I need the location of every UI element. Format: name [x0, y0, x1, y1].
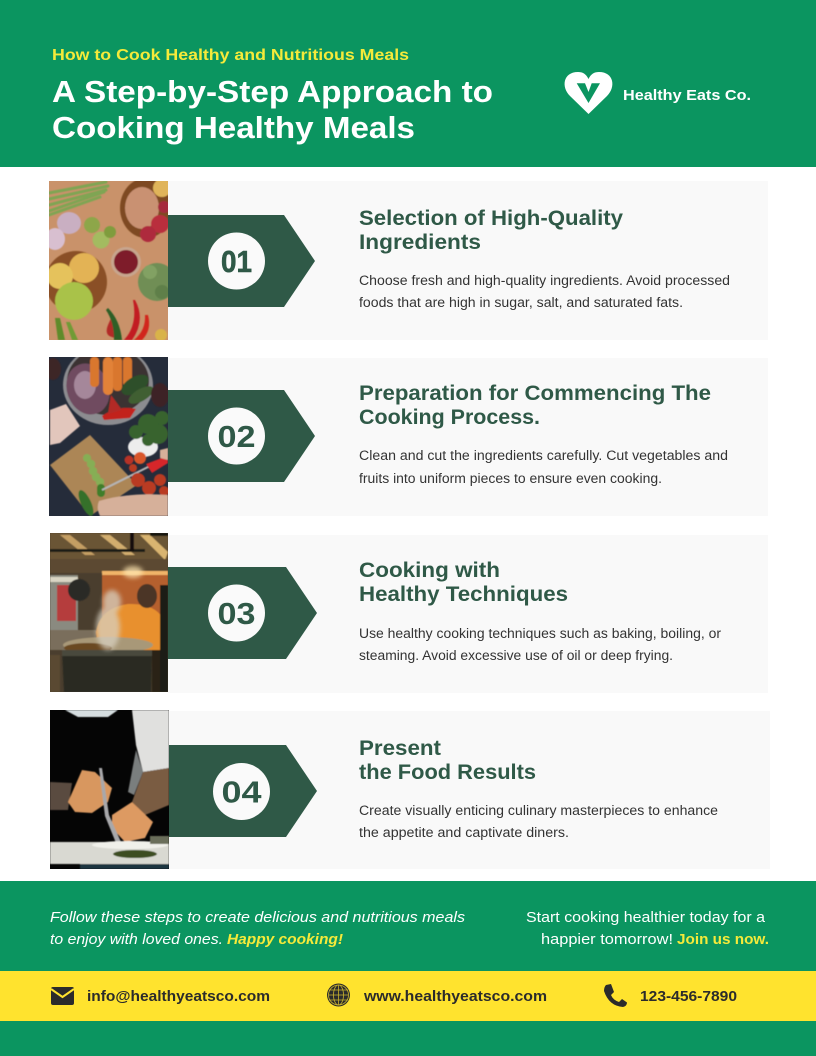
step 3 description: [359, 626, 722, 663]
step 2 heading: [359, 382, 711, 429]
step 1 number badge: 01: [221, 244, 252, 279]
footer message left: Follow these steps to create delicious and nutritious meals: [50, 910, 465, 926]
footer message right: happier tomorrow!: [541, 932, 673, 948]
step 1 number badge: [208, 232, 265, 290]
step 3 heading: Healthy Techniques: [359, 583, 568, 606]
footer message right: Start cooking healthier today for a: [526, 910, 766, 926]
footer band: [0, 881, 816, 1056]
step 2 number badge: [208, 408, 265, 464]
icon: phone: [604, 984, 627, 1007]
step 2 card background: [168, 358, 768, 516]
icon: envelope: [51, 987, 74, 1005]
step 1 heading: Ingredients: [359, 231, 481, 254]
step 2 panel: [49, 357, 728, 516]
step 3 description: steaming. Avoid excessive use of oil or deep frying.: [359, 648, 673, 663]
step 4 heading: [359, 737, 536, 784]
step 4 heading: the Food Results: [359, 761, 536, 784]
logo: Healthy Eats Co.: Healthy Eats Co.: [623, 87, 751, 104]
subtitle: How to Cook Healthy and Nutritious Meals: [52, 47, 409, 64]
step 4 arrow: [169, 745, 317, 837]
step 2 description: fruits into uniform pieces to ensure even cooking.: [359, 471, 662, 486]
step 3 heading: Cooking with: [359, 559, 500, 582]
icon: globe: [327, 984, 350, 1006]
step 2 description: [359, 448, 728, 486]
footer message left: Happy cooking!: [227, 932, 343, 948]
step 3 number badge: [208, 584, 265, 642]
main title: A Step-by-Step Approach to: [52, 74, 493, 109]
logo: Healthy Eats Co.: [565, 72, 751, 114]
step 4 description: the appetite and captivate diners.: [359, 825, 569, 840]
footer message left: [50, 910, 465, 948]
website contact: [327, 984, 547, 1006]
step 4 description: [359, 803, 718, 840]
phone contact: [604, 984, 737, 1007]
step 1 card background: [168, 181, 768, 340]
step 1 heading: [359, 207, 623, 254]
footer message right: Join us now.: [677, 932, 769, 948]
step 1 description: [359, 273, 730, 310]
step 2 description: Clean and cut the ingredients carefully. Cut vegetables and: [359, 448, 728, 463]
step 2 number badge: 02: [218, 419, 256, 454]
contact bar: [0, 971, 816, 1021]
step 4 description: Create visually enticing culinary masterpieces to enhance: [359, 803, 718, 818]
step 4 card background: [169, 711, 770, 869]
main title: Cooking Healthy Meals: [52, 110, 415, 145]
step 1 arrow: [168, 215, 315, 307]
step 2 arrow: [168, 390, 315, 482]
footer message right: [526, 910, 769, 948]
phone contact: 123-456-7890: [640, 988, 737, 1005]
step 1 heading: Selection of High-Quality: [359, 207, 623, 230]
footer message left: to enjoy with loved ones.: [50, 932, 223, 948]
step 2 heading: Cooking Process.: [359, 406, 540, 429]
header band: [0, 0, 816, 167]
step 4 number badge: 04: [222, 774, 262, 810]
email contact: info@healthyeatsco.com: [87, 988, 270, 1005]
step 1 description: foods that are high in sugar, salt, and saturated fats.: [359, 295, 683, 310]
step 2 photo: preparing vegetables: [49, 357, 168, 516]
step 3 panel: [50, 533, 768, 693]
step 4 number badge: [213, 763, 270, 820]
website contact: www.healthyeatsco.com: [363, 988, 547, 1005]
step 4 photo: chef plating: [50, 710, 169, 869]
step 3 heading: [359, 559, 568, 606]
step 1 description: Choose fresh and high-quality ingredients. Avoid processed: [359, 273, 730, 288]
step 3 card background: [168, 535, 768, 693]
step 4 panel: [50, 710, 770, 869]
step 2 heading: Preparation for Commencing The: [359, 382, 711, 405]
step 1 photo: vegetables: [49, 181, 168, 340]
step 3 number badge: 03: [218, 596, 256, 631]
step 3 arrow: [168, 567, 317, 659]
step 3 photo: cooking pot: [50, 533, 168, 692]
step 1 panel: [45, 178, 768, 341]
step 3 description: Use healthy cooking techniques such as baking, boiling, or: [359, 626, 722, 641]
step 4 heading: Present: [359, 737, 441, 760]
main title: [52, 74, 493, 145]
